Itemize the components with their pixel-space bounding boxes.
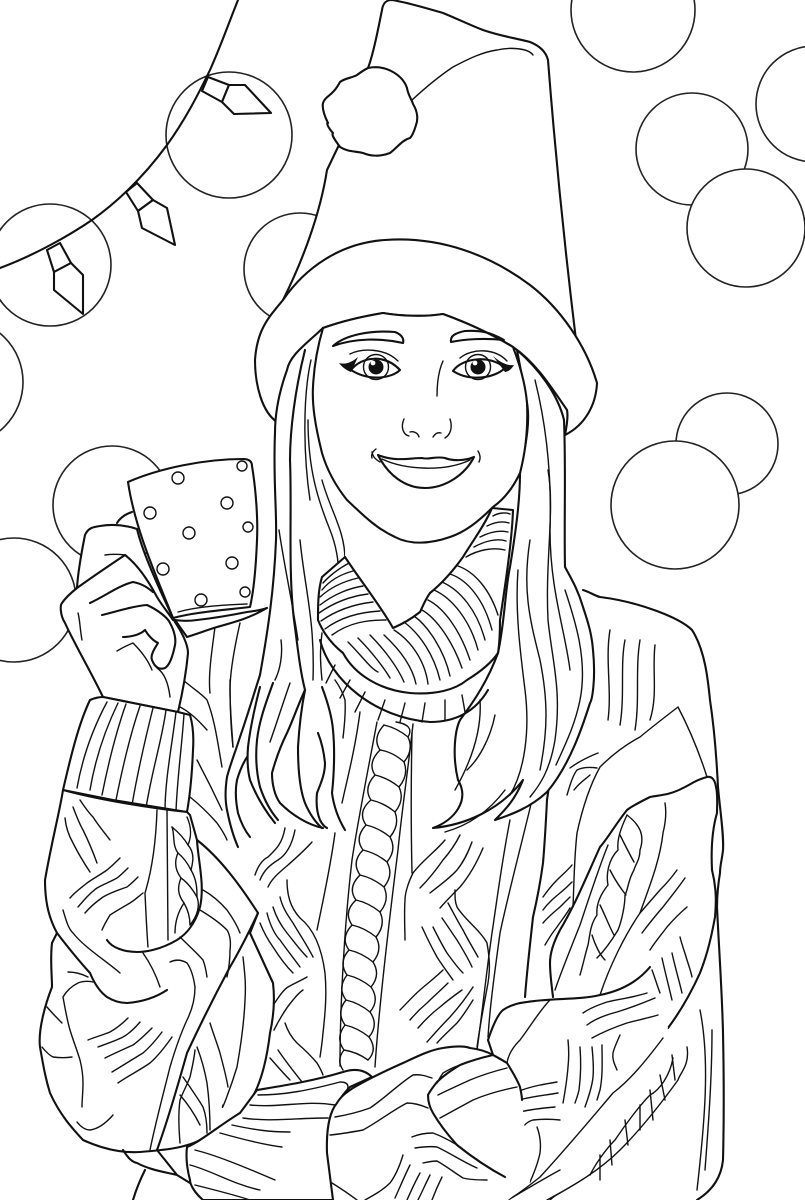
mug saucer bbox=[175, 608, 267, 637]
sweater right panel lines bbox=[525, 630, 707, 997]
sleeve cuff bbox=[63, 697, 193, 812]
nose bbox=[402, 361, 451, 438]
eyebrows bbox=[333, 331, 504, 346]
smiling mouth bbox=[372, 449, 480, 488]
left eye bbox=[339, 350, 400, 380]
mug dots bbox=[144, 461, 253, 606]
string of lights bbox=[0, 0, 271, 314]
mug handle bbox=[117, 512, 132, 523]
left hair strands bbox=[226, 328, 345, 847]
left hair bbox=[226, 328, 347, 847]
left sleeve bbox=[40, 790, 274, 1152]
Santa hat bbox=[255, 0, 597, 435]
hat brim bbox=[255, 239, 597, 435]
sleeve side cable bbox=[172, 817, 228, 1143]
sweater body bbox=[100, 590, 724, 1200]
sleeve upper fold bbox=[107, 840, 202, 952]
hand holding mug bbox=[61, 525, 188, 712]
right forearm bbox=[327, 967, 668, 1200]
sweater cable waves centre right bbox=[400, 733, 532, 1050]
turtleneck collar bbox=[318, 497, 513, 722]
sweater knit lines bbox=[180, 623, 707, 1082]
collar ribs bbox=[319, 513, 510, 722]
sweater outline right bbox=[583, 590, 724, 1200]
background bokeh circles bbox=[0, 0, 805, 662]
polka dot mug bbox=[117, 459, 267, 637]
right eye bbox=[453, 351, 514, 380]
right shoulder and sleeve bbox=[327, 777, 717, 1200]
hat fold bbox=[412, 48, 533, 100]
clasped right hand bbox=[327, 1046, 530, 1200]
sweater cable waves centre left bbox=[255, 828, 326, 1082]
central cable knit bbox=[340, 722, 413, 1070]
right hair bbox=[433, 350, 594, 832]
middle crossed arm bbox=[123, 1070, 372, 1200]
right hair strands bbox=[510, 380, 570, 795]
neck and face bbox=[313, 313, 527, 543]
right sleeve cable bbox=[555, 803, 666, 995]
hat pompom bbox=[323, 67, 417, 156]
